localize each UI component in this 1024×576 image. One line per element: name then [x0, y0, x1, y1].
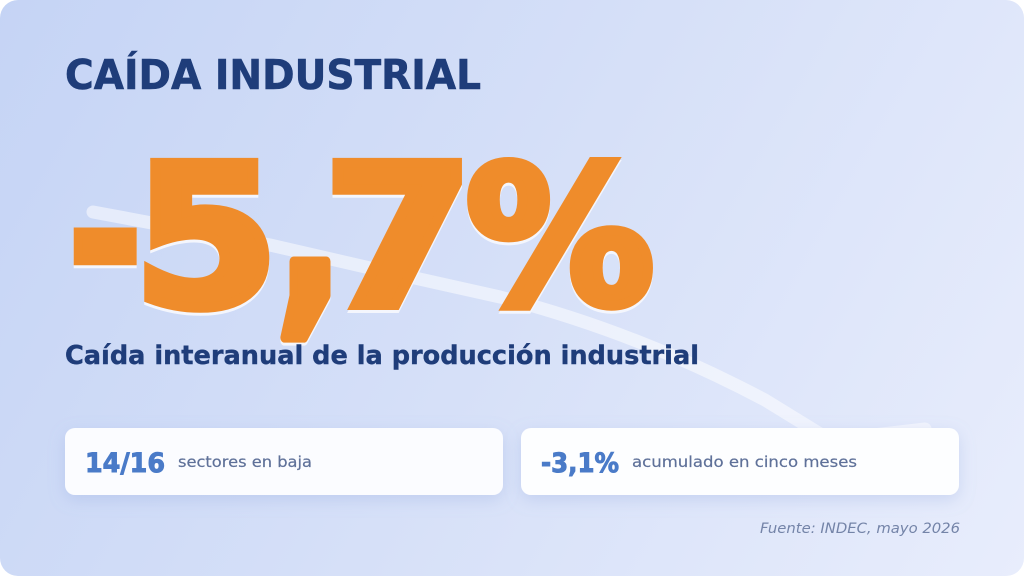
- big figure: [69, 93, 654, 363]
- card label: sectores en baja: [178, 453, 312, 471]
- card value: -3,1%: [541, 448, 619, 479]
- declining trend line: [93, 212, 925, 440]
- big figure value: 7: [324, 124, 474, 351]
- card label: acumulado en cinco meses: [632, 453, 857, 471]
- big figure highlight: 7: [324, 127, 474, 354]
- card: sectores: [65, 428, 503, 495]
- big figure highlight: 5: [134, 127, 278, 354]
- big figure highlight: ,: [274, 96, 346, 363]
- big figure highlight: [69, 96, 654, 363]
- big figure value: 5: [134, 124, 278, 351]
- big figure value: ,: [274, 93, 346, 360]
- big figure highlight: %: [466, 130, 654, 351]
- big figure highlight: -: [69, 124, 142, 352]
- subtitle: Caída interanual de la producción industrial: [65, 341, 699, 371]
- card value: 14/16: [85, 448, 165, 479]
- big figure value: [69, 93, 654, 360]
- source note: Fuente: INDEC, mayo 2026: [760, 521, 960, 537]
- big figure value: -: [69, 122, 142, 348]
- title: CAÍDA INDUSTRIAL: [65, 51, 481, 99]
- card: acumulado: [521, 428, 959, 495]
- big figure value: %: [466, 127, 654, 348]
